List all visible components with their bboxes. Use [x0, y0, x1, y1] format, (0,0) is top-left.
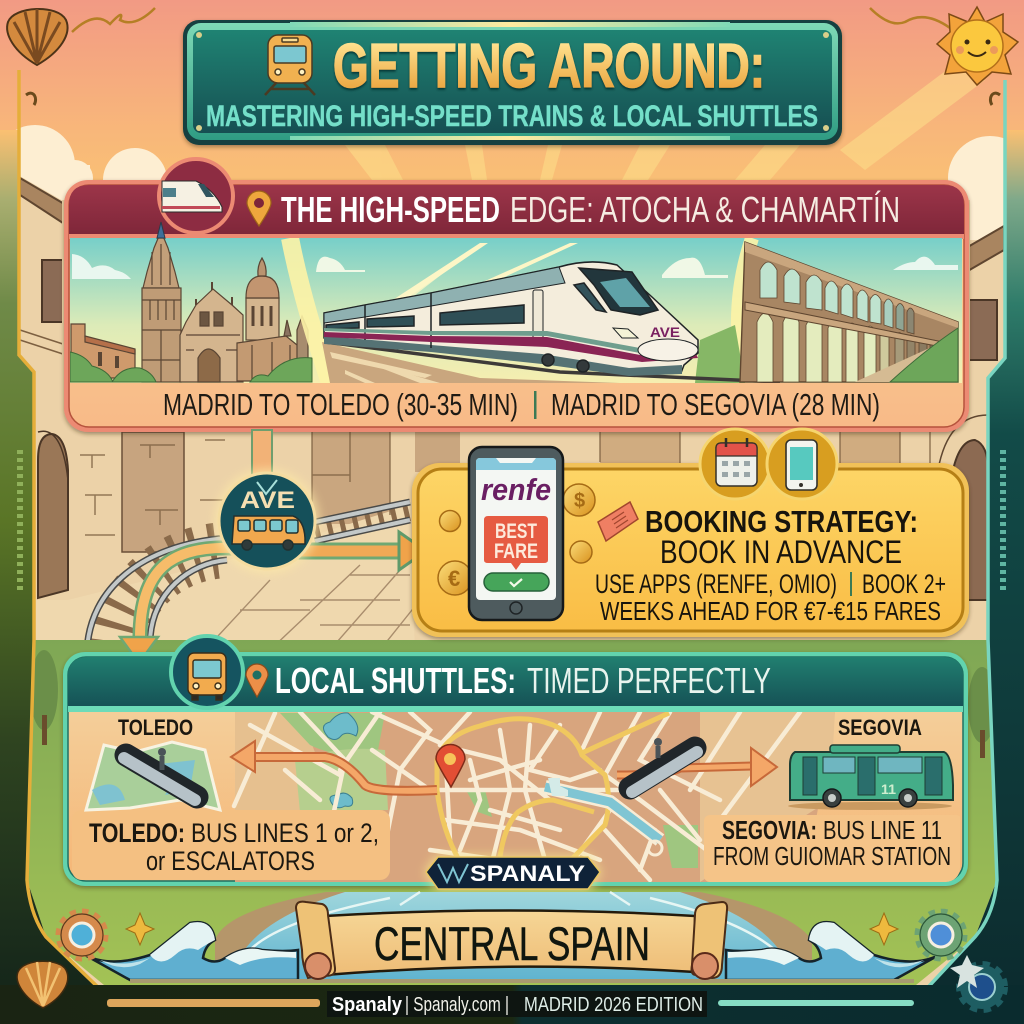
- route times text: MADRID TO TOLEDO (30-35 MIN): [163, 387, 518, 422]
- icon: phone with renfe app: renfe: [481, 472, 551, 507]
- panel heading: [281, 189, 900, 230]
- icon: location pin: [247, 191, 271, 226]
- icon: train front: [265, 35, 315, 95]
- Toledo cathedral: [71, 222, 308, 382]
- coins: €: [448, 566, 460, 591]
- booking text: BOOKING STRATEGY:: [645, 504, 918, 539]
- icon: bus badge: [171, 636, 243, 708]
- decoration: bottom right gear with star: [950, 955, 1004, 1009]
- background: curved rail track: [87, 502, 410, 650]
- icon: smiling sun: [937, 7, 1018, 85]
- heading: getting around: GETTING AROUND:: [333, 32, 765, 101]
- subheading: MASTERING HIGH-SPEED TRAINS & LOCAL SHUTTLES: [206, 100, 818, 133]
- decoration: left gear: [60, 913, 104, 957]
- AVE train: AVE: [650, 324, 680, 340]
- ring roads: [434, 712, 670, 856]
- icon: location pin: [246, 664, 268, 697]
- arrow: hub to local shuttles: [120, 548, 232, 663]
- icon: phone with renfe app: FARE: [494, 540, 538, 563]
- decoration: right gear: [919, 913, 963, 957]
- icon: escalator left: [124, 748, 197, 800]
- text background: Segovia: [704, 815, 962, 882]
- ground edge line: [130, 979, 914, 983]
- panel heading light: TIMED PERFECTLY: [527, 660, 771, 701]
- booking text: BOOK 2+: [862, 569, 946, 599]
- panel heading: EDGE: ATOCHA & CHAMARTÍN: [510, 189, 900, 230]
- ponds: [323, 713, 358, 808]
- shuttle header: [68, 636, 963, 712]
- streets: [234, 712, 800, 880]
- map: [72, 712, 962, 882]
- icon: escalator right: [630, 738, 697, 792]
- panel: booking strategy: [412, 429, 969, 637]
- river and banks: [215, 892, 812, 981]
- bushes: [70, 352, 312, 382]
- booking text: USE APPS (RENFE, OMIO): [595, 569, 837, 599]
- clouds in scene: [72, 254, 958, 279]
- centre clouds: [316, 257, 365, 272]
- icon: smartphone badge: [767, 429, 837, 499]
- cathedral spire over header: [157, 222, 165, 238]
- Aqueduct: [740, 242, 958, 382]
- route times text: [163, 387, 880, 422]
- text background: Toledo: [72, 810, 390, 880]
- speed lines: [340, 243, 578, 349]
- panel: high-speed edge: [64, 159, 969, 432]
- route arrows: [231, 741, 777, 791]
- Segovia text: [713, 815, 951, 871]
- icon: AVE hub badge: [215, 469, 319, 573]
- icon: bus: [232, 516, 305, 550]
- booking text: WEEKS AHEAD FOR €7-€15 FARES: [600, 596, 941, 626]
- footer: MADRID 2026 EDITION: [524, 994, 703, 1016]
- decoration: right wave: [726, 922, 939, 980]
- icon: phone with renfe app: BEST: [495, 520, 537, 543]
- decoration: gold stars: [126, 913, 898, 945]
- centre scene: [662, 258, 705, 275]
- decoration: scallop shell top left: [7, 9, 68, 65]
- panel heading: THE HIGH-SPEED: [281, 189, 500, 230]
- footer: Spanaly: [332, 994, 403, 1016]
- connector: panel to hub: [252, 430, 272, 480]
- footer: | Spanaly.com |: [405, 994, 509, 1016]
- AVE train: [324, 262, 698, 376]
- background: right stone wall: [960, 226, 1006, 650]
- badge: Spanaly logo: SPANALY: [470, 861, 585, 886]
- Toledo text: or ESCALATORS: [146, 846, 315, 876]
- decoration: left wave: [85, 922, 298, 980]
- booking text: [595, 504, 946, 626]
- river: [545, 787, 660, 840]
- background: sunset sky: [0, 0, 1024, 240]
- rail: [325, 342, 780, 382]
- decoration: scallop shell bottom left: [17, 961, 68, 1008]
- icon: map pin: [436, 744, 465, 787]
- Toledo text: TOLEDO:: [89, 818, 185, 848]
- icon: calendar badge: [700, 429, 770, 499]
- label: Segovia: SEGOVIA: [838, 715, 922, 740]
- icon: green bus 11: [788, 745, 953, 810]
- decoration: vine top left: [72, 8, 155, 32]
- Segovia text: BUS LINE 11: [823, 815, 942, 845]
- coins: [438, 484, 595, 595]
- parks: [280, 713, 698, 868]
- Segovia text: SEGOVIA:: [722, 815, 817, 845]
- icon: green bus 11: 11: [881, 781, 896, 797]
- decoration: vine top right: [870, 8, 950, 28]
- background: grass ground: [27, 640, 997, 985]
- Toledo text: [89, 818, 379, 876]
- background: sun rays: [345, 60, 985, 180]
- coins: $: [574, 490, 585, 512]
- icon: folded map: [86, 742, 220, 810]
- banner: central spain scroll: [296, 902, 727, 979]
- background: left stone wall: [18, 175, 70, 650]
- title banner: [183, 20, 842, 145]
- image: Toledo, AVE train and Segovia aqueduct: [70, 222, 962, 383]
- icon: AVE hub badge: AVE: [240, 487, 295, 514]
- label: Toledo: TOLEDO: [118, 715, 193, 740]
- panel: local shuttles: [63, 636, 968, 886]
- Toledo text: BUS LINES 1 or 2,: [191, 818, 379, 848]
- panel heading: LOCAL SHUTTLES:: [275, 660, 516, 701]
- footer: [0, 985, 1024, 1024]
- background: centre wall and pavement: [36, 200, 988, 652]
- arrow: hub to booking: [300, 532, 426, 570]
- icon: phone with renfe app: [469, 447, 563, 620]
- icon: train badge: [159, 159, 233, 233]
- background: clouds: [0, 125, 1024, 240]
- route times text: MADRID TO SEGOVIA (28 MIN): [551, 387, 880, 422]
- booking text: BOOK IN ADVANCE: [660, 534, 902, 570]
- badge: Spanaly logo: [424, 855, 602, 891]
- icon: ticket: [598, 502, 638, 541]
- banner: central spain scroll: CENTRAL SPAIN: [374, 917, 650, 970]
